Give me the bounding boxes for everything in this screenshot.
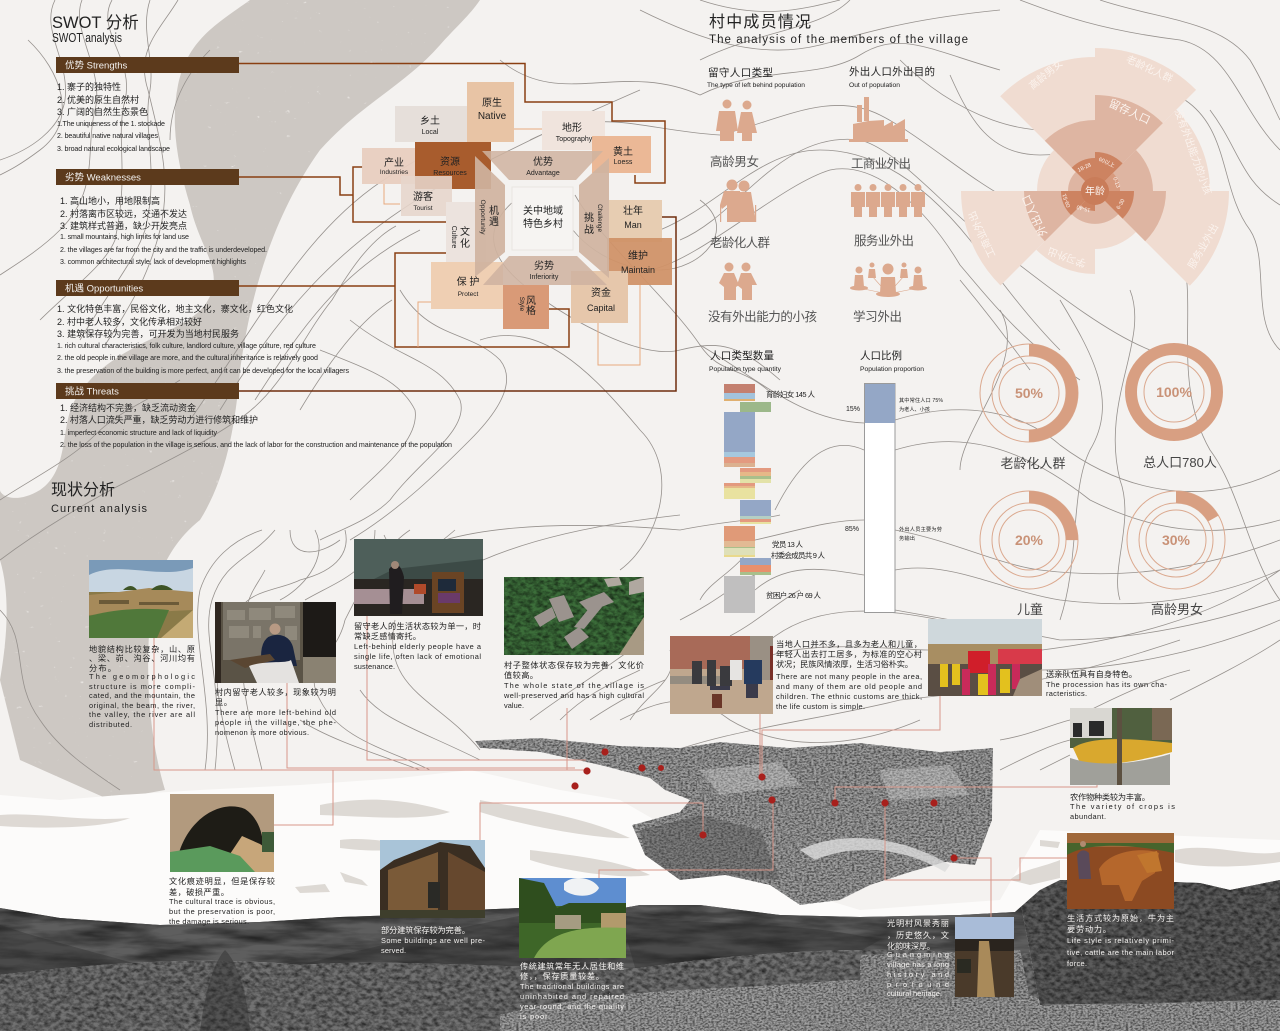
caption: local population: 状况；民族风情浓厚，生活习俗朴实。 bbox=[776, 659, 913, 669]
opportunities text bbox=[57, 303, 349, 375]
threats heading bar bbox=[56, 383, 239, 399]
caption: landform: cated, and the mountain, the bbox=[89, 691, 195, 700]
opportunities text: 2. 村中老人较多，文化传承相对较好 bbox=[57, 316, 202, 327]
diagram labels: 劣势 bbox=[534, 259, 554, 272]
heading: The type of left behind population bbox=[707, 82, 805, 89]
panel: left behind population types bbox=[707, 66, 817, 324]
photo: Guangming village building bbox=[955, 917, 1014, 997]
rose labels: 18-28 bbox=[1077, 162, 1092, 174]
centre circle bbox=[1081, 177, 1109, 205]
caption: traditional buildings: is poor. bbox=[520, 1012, 550, 1021]
diagram labels: 化 bbox=[460, 237, 470, 250]
strengths heading bar: 优势 Strengths bbox=[65, 60, 128, 72]
block: Native bbox=[467, 82, 514, 142]
caption: left-behind elderly: people in the village, the phe- bbox=[215, 718, 337, 727]
title: current analysis bbox=[51, 481, 148, 515]
rose labels: 留存人口 bbox=[1107, 96, 1153, 127]
weaknesses text bbox=[60, 195, 267, 266]
diagram labels: 维护 bbox=[628, 249, 648, 262]
diagram labels: 机 bbox=[489, 204, 499, 217]
rose labels: 60以上 bbox=[1097, 155, 1117, 170]
strengths text: 2. beautiful native natural villages bbox=[57, 132, 158, 140]
rose labels bbox=[965, 52, 1221, 271]
threats text: 2. 村落人口流失严重，缺乏劳动力进行修筑和维护 bbox=[60, 414, 258, 425]
diagram labels: 壮年 bbox=[623, 204, 643, 217]
threats text bbox=[60, 402, 452, 449]
caption: traditional buildings: year-round, and the quality bbox=[520, 1002, 624, 1011]
caption: Guangming village: 化韵味深厚。 bbox=[887, 941, 935, 951]
block: Maintain bbox=[607, 238, 672, 285]
opportunities text: 3. 建筑保存较为完善，可开发为当地村民服务 bbox=[57, 328, 239, 339]
proportion labels: 其中常住人口 75% bbox=[899, 396, 943, 404]
shrub bbox=[200, 950, 250, 1031]
photo: corn harvest bbox=[1070, 708, 1172, 785]
strengths text: 1.The uniqueness of the 1. stockade bbox=[57, 120, 165, 128]
caption: cultural traces: The cultural trace is obvious, bbox=[169, 897, 275, 906]
panel: opportunities bbox=[56, 280, 349, 375]
caption: cultural traces bbox=[169, 876, 275, 926]
heading: 留守人口类型 bbox=[708, 66, 773, 79]
caption: crops: abundant. bbox=[1070, 812, 1106, 821]
caption: village state: 村子整体状态保存较为完善，文化价 bbox=[504, 660, 644, 670]
block: Protect bbox=[431, 262, 503, 309]
block: Resources bbox=[415, 142, 491, 189]
caption: Guangming village: village has a long bbox=[887, 960, 949, 969]
weaknesses heading bar bbox=[56, 169, 239, 185]
chart: donut 50%: 50% bbox=[1015, 385, 1044, 401]
caption: local population bbox=[776, 639, 922, 711]
caption: left-behind elderly bbox=[215, 687, 337, 737]
dark hill slope bbox=[0, 916, 876, 975]
caption: elderly living state bbox=[354, 621, 482, 671]
rose labels: 09-51 bbox=[1062, 193, 1072, 208]
caption: landform: the valley, the river are all bbox=[89, 710, 195, 719]
photo: loess terraces bbox=[89, 560, 193, 638]
rose labels: 年龄 bbox=[1085, 184, 1105, 198]
strengths text bbox=[57, 81, 170, 153]
label: 服务业外出 bbox=[854, 233, 914, 248]
caption: elderly living state: 常缺乏感情寄托。 bbox=[354, 631, 421, 641]
chart: donut 30%: 30% bbox=[1162, 532, 1191, 548]
foreground scrub bbox=[0, 948, 1280, 1031]
chart: donut 50% bbox=[980, 344, 1078, 442]
diagram labels: 乡土 bbox=[420, 114, 440, 127]
diagram labels: 特色乡村 bbox=[523, 217, 563, 230]
diagram labels: Style bbox=[518, 297, 525, 312]
rose labels: 15-40 bbox=[1076, 203, 1091, 213]
caption: village state bbox=[503, 660, 644, 710]
caption: lifestyle: 要劳动力。 bbox=[1067, 924, 1111, 934]
caption: Guangming village: ，历史悠久，文 bbox=[887, 930, 949, 940]
trapezoid: Challenge bbox=[579, 158, 609, 278]
title: SWOT: SWOT analysis bbox=[52, 31, 122, 45]
diagram labels: Industries bbox=[380, 169, 409, 176]
trapezoid: Inferiority bbox=[483, 256, 607, 285]
caption: left-behind elderly: There are more left-behind old bbox=[215, 708, 336, 717]
connector lines to photos bbox=[154, 616, 1097, 917]
caption: left-behind elderly: 显。 bbox=[215, 698, 232, 707]
strengths text: 3. broad natural ecological landscape bbox=[57, 145, 170, 153]
inner sectors bbox=[1061, 152, 1134, 219]
stacked bars bbox=[724, 384, 771, 613]
caption: lifestyle bbox=[1067, 913, 1175, 968]
diagram labels: 资金 bbox=[591, 286, 611, 299]
label: 学习外出 bbox=[853, 309, 902, 324]
heading: Population proportion bbox=[860, 366, 924, 373]
weaknesses text: 2. 村落离市区较远，交通不发达 bbox=[60, 208, 187, 219]
donut label: children: 儿童 bbox=[1017, 602, 1043, 617]
threats text: 1. imperfect economic structure and lack of liquidity bbox=[60, 429, 217, 437]
caption: elderly living state: sustenance. bbox=[354, 662, 395, 671]
rose labels: 工商业外出 bbox=[965, 209, 998, 260]
caption: Guangming village: 光明村风景秀丽 bbox=[887, 918, 949, 928]
title: village members: 村中成员情况 bbox=[709, 13, 811, 31]
opportunities text: 1. rich cultural characteristics, folk culture, landlord culture, village culture, red culture bbox=[57, 342, 316, 350]
photo: bedroom bbox=[354, 539, 483, 616]
SWOT connectors bbox=[239, 64, 676, 391]
Guangming foreground bbox=[860, 950, 1030, 1005]
heading bbox=[707, 66, 805, 89]
threats text: 1. 经济结构不完善，缺乏流动资金 bbox=[60, 402, 196, 413]
foreground stalks bbox=[500, 979, 1280, 1031]
caption: Guangming village: profound bbox=[887, 980, 949, 989]
threats text: 2. the loss of the population in the village is serious, and the lack of labor for the construction and maintenance of the population bbox=[60, 441, 452, 449]
bar labels bbox=[766, 389, 826, 600]
photo: ox ploughing bbox=[1067, 833, 1174, 909]
diagram labels: Capital bbox=[587, 303, 615, 313]
caption: local population: 当地人口并不多，且多为老人和儿童， bbox=[776, 639, 922, 649]
diagram labels: 黄土 bbox=[613, 145, 633, 158]
trapezoid: Advantage bbox=[482, 151, 603, 180]
trapezoid: Opportunity bbox=[475, 156, 505, 277]
diagram labels: Loess bbox=[614, 159, 633, 166]
strengths text: 1. 寨子的独特性 bbox=[57, 81, 121, 92]
label: 工商业外出 bbox=[851, 156, 911, 171]
threats heading bar: 挑战 Threats bbox=[65, 386, 119, 398]
heading: Out of population bbox=[849, 82, 900, 89]
caption: landform: The geomorphologic bbox=[89, 672, 195, 681]
caption: local population: 年轻人出去打工居多，为标准的空心村 bbox=[776, 649, 922, 659]
caption: procession: The procession has its own cha- bbox=[1046, 680, 1168, 689]
caption: traditional buildings: uninhabited and repaired bbox=[520, 992, 624, 1001]
chart: age rose diagram bbox=[961, 48, 1229, 286]
diagram labels: Local bbox=[422, 129, 439, 136]
diagram labels: Tourist bbox=[413, 205, 433, 212]
bar labels: 村委会成员共 9 人 bbox=[771, 550, 826, 560]
village panorama bbox=[475, 738, 993, 905]
title: village members: The analysis of the members of the village bbox=[709, 34, 968, 46]
panel: weaknesses bbox=[56, 169, 267, 266]
proportion bar bbox=[864, 384, 895, 612]
diagram labels: 格 bbox=[526, 304, 536, 317]
block: Tourist bbox=[401, 176, 452, 216]
caption: elderly living state: 留守老人的生活状态较为单一，时 bbox=[354, 621, 481, 631]
rose labels: 0-13 bbox=[1111, 176, 1121, 189]
block: Local bbox=[395, 106, 467, 142]
caption: preserved buildings: Some buildings are well pre- bbox=[381, 936, 486, 945]
label: 高龄男女 bbox=[710, 154, 759, 169]
caption: preserved buildings bbox=[381, 925, 486, 955]
caption: local population: There are not many people in the area, bbox=[776, 672, 922, 681]
caption: traditional buildings: 修，，保存质量较差。 bbox=[520, 971, 604, 981]
caption: crops: 农作物种类较为丰富。 bbox=[1070, 792, 1150, 802]
opportunities text: 3. the preservation of the building is more perfect, and it can be developed for the local villagers bbox=[57, 367, 349, 375]
proportion labels: 外出人员主要为劳 bbox=[899, 525, 942, 533]
caption: crops: The variety of crops is bbox=[1070, 802, 1175, 811]
caption: local population: and many of them are old people and bbox=[776, 682, 922, 691]
caption: preserved buildings: served. bbox=[381, 946, 406, 955]
right dark tree area bbox=[1020, 880, 1280, 1005]
caption: procession: 送亲队伍具有自身特色。 bbox=[1046, 669, 1137, 679]
caption: traditional buildings: The traditional buildings are bbox=[520, 982, 624, 991]
proportion labels bbox=[845, 396, 943, 542]
caption: procession bbox=[1046, 669, 1168, 698]
opportunities heading bar bbox=[56, 280, 239, 296]
diagram labels: Maintain bbox=[621, 265, 655, 275]
diagram labels: Topography bbox=[556, 136, 593, 143]
caption: traditional buildings: 传统建筑常年无人居住和维 bbox=[520, 961, 624, 971]
photo: elderly man with dog bbox=[215, 602, 336, 683]
caption: cultural traces: 差，破损严重。 bbox=[169, 887, 229, 897]
diagram labels: 地形 bbox=[562, 121, 582, 134]
caption: landform: 、梁、峁、沟谷、河川均有 bbox=[89, 653, 195, 663]
panel: strengths bbox=[56, 57, 239, 153]
icon: elderly man and woman bbox=[716, 100, 757, 141]
heading bbox=[709, 349, 782, 373]
icon: five workers bbox=[851, 184, 925, 217]
heading bbox=[860, 349, 924, 373]
diagram labels: 优势 bbox=[533, 155, 553, 168]
caption: preserved buildings: 部分建筑保存较为完善。 bbox=[381, 925, 470, 935]
icon: aged couple with canes bbox=[720, 180, 756, 222]
chart: donut 20%: 20% bbox=[1015, 532, 1044, 548]
chart: donut 30% bbox=[1127, 491, 1225, 589]
proportion labels: 务输出 bbox=[899, 534, 915, 542]
label: 老龄化人群 bbox=[710, 236, 770, 250]
title: current analysis: 现状分析 bbox=[51, 481, 115, 499]
title: village members bbox=[709, 13, 968, 46]
caption: Guangming village: history and bbox=[887, 970, 949, 979]
photo: cave bbox=[170, 794, 274, 872]
opportunities heading bar: 机遇 Opportunities bbox=[65, 282, 143, 294]
caption: lifestyle: 生活方式较为原始，牛为主 bbox=[1067, 913, 1174, 923]
caption: traditional buildings bbox=[520, 961, 624, 1021]
bar labels: 党员 13 人 bbox=[772, 539, 804, 549]
block: Culture bbox=[446, 202, 486, 271]
diagram labels: Opportunity bbox=[479, 199, 486, 235]
rose labels: 没有外出能力的小孩 bbox=[1172, 107, 1215, 196]
donut label: elderly men and women: 高龄男女 bbox=[1151, 602, 1203, 617]
caption: elderly living state: single life, often lack of emotional bbox=[354, 652, 481, 661]
chart: donut 100%: 100% bbox=[1156, 384, 1192, 400]
title: SWOT bbox=[52, 13, 139, 45]
panel: threats bbox=[56, 383, 452, 449]
caption: left-behind elderly: 村内留守老人较多，现象较为明 bbox=[215, 687, 336, 697]
proportion labels: 15% bbox=[846, 406, 860, 413]
heading: Population type quantity bbox=[709, 366, 782, 373]
donut label: total: 总人口780人 bbox=[1143, 455, 1217, 470]
heading: 人口类型数量 bbox=[710, 349, 774, 362]
panel: out-going population purposes bbox=[849, 65, 935, 324]
rose labels: 高龄男女 bbox=[1026, 56, 1065, 92]
caption: lifestyle: force. bbox=[1067, 959, 1087, 968]
strengths heading bar bbox=[56, 57, 239, 73]
diagram labels: Man bbox=[624, 220, 642, 230]
weaknesses text: 3. 建筑样式普通，缺少开发亮点 bbox=[60, 220, 187, 231]
heading bbox=[849, 65, 935, 89]
proportion labels: 为老人、小孩 bbox=[899, 405, 930, 413]
diagram labels: 产业 bbox=[384, 156, 404, 169]
rose labels: 6-30 bbox=[1116, 198, 1126, 211]
centre square bbox=[512, 187, 573, 250]
diagram labels: Advantage bbox=[526, 170, 560, 177]
photo: aerial village bbox=[504, 577, 644, 655]
caption: elderly living state: Left-behind elderly people have a bbox=[354, 642, 482, 651]
caption: landform: structure is more compli- bbox=[89, 682, 196, 691]
rose labels: 外出人口 bbox=[1019, 193, 1050, 239]
caption: village state: The whole state of the village is bbox=[504, 681, 644, 690]
caption: left-behind elderly: nomenon is more obvious. bbox=[215, 728, 309, 737]
caption: landform: 分布。 bbox=[89, 663, 116, 673]
rose labels: 学习外出 bbox=[1046, 244, 1088, 270]
caption: cultural traces: 文化痕迹明显，但是保存较 bbox=[169, 876, 275, 886]
weaknesses text: 1. 高山地小，用地限制高 bbox=[60, 195, 160, 206]
donut label: aged: 老龄化人群 bbox=[1000, 456, 1066, 471]
block: Man bbox=[609, 200, 662, 242]
background: white lower brush area bbox=[0, 770, 1280, 931]
caption: village state: well-preserved and has a high cultural bbox=[503, 691, 644, 700]
far hills bbox=[0, 905, 1030, 970]
diagram labels bbox=[380, 96, 655, 317]
title: SWOT: SWOT 分析 bbox=[52, 13, 139, 32]
diagram labels: Inferiority bbox=[530, 274, 559, 281]
diagram labels: 游客 bbox=[413, 190, 433, 203]
caption: village state: value. bbox=[504, 701, 524, 710]
rose labels: 服务业外出 bbox=[1185, 221, 1221, 271]
background: grey brush mountain shape bbox=[0, 0, 480, 800]
diagram labels: Protect bbox=[458, 291, 478, 298]
background: scattered brush strokes bbox=[0, 800, 1280, 893]
caption: landform: 地貌结构比较复杂，山、原 bbox=[89, 644, 195, 654]
village location dots bbox=[571, 748, 958, 862]
heading: 外出人口外出目的 bbox=[849, 65, 935, 78]
heading: 人口比例 bbox=[860, 349, 902, 362]
diagram labels: 遇 bbox=[489, 216, 499, 228]
weaknesses heading bar: 劣势 Weaknesses bbox=[65, 172, 141, 184]
weaknesses text: 1. small mountains, high limits for land use bbox=[60, 233, 189, 241]
title: current analysis: Current analysis bbox=[51, 503, 148, 515]
strengths text: 2. 优美的原生自然村 bbox=[57, 94, 139, 105]
photo: wedding procession bbox=[928, 619, 1042, 696]
proportion labels: 85% bbox=[845, 526, 859, 533]
middle sectors bbox=[1024, 95, 1166, 241]
weaknesses text: 2. the villages are far from the city and the traffic is underdeveloped. bbox=[60, 246, 267, 254]
caption: landform: original, the beam, the river, bbox=[89, 701, 195, 710]
diagram labels: 战 bbox=[584, 224, 594, 236]
caption: cultural traces: but the preservation is poor, bbox=[169, 907, 275, 916]
caption: village state: 值较高。 bbox=[504, 670, 538, 680]
diagram labels: 关中地域 bbox=[523, 204, 563, 217]
photo: old brick building bbox=[380, 840, 485, 918]
outer sectors bbox=[961, 48, 1229, 286]
photo: abandoned buildings bbox=[519, 878, 626, 958]
diagram labels: Culture bbox=[450, 226, 457, 248]
caption: lifestyle: Life style is relatively primi- bbox=[1067, 936, 1175, 945]
caption: landform: distributed. bbox=[89, 720, 132, 729]
photo: villagers sitting bbox=[670, 636, 773, 714]
caption: Guangming village: Guangming bbox=[887, 950, 949, 959]
opportunities text: 1. 文化特色丰富，民俗文化，地主文化，寨文化，红色文化 bbox=[57, 303, 293, 314]
background: contour lines bbox=[0, 0, 1280, 790]
diagram labels: 风 bbox=[526, 295, 536, 307]
bar labels: 贫困户 26 户 69 人 bbox=[766, 590, 822, 600]
diagram labels: 挑 bbox=[584, 211, 594, 224]
diagram labels: Native bbox=[478, 111, 507, 122]
caption: local population: children. The ethnic customs are thick, bbox=[776, 692, 922, 701]
caption: landform bbox=[89, 644, 196, 729]
caption: Guangming village: cultural heritage. bbox=[887, 989, 942, 998]
rose labels: 老龄化人群 bbox=[1124, 52, 1175, 85]
icon: factory bbox=[849, 97, 908, 142]
caption: Guangming village bbox=[887, 918, 949, 998]
chart: donut 20% bbox=[980, 491, 1078, 589]
icon: network of people bbox=[850, 262, 927, 297]
caption: local population: the life custom is simple. bbox=[776, 702, 865, 711]
label: 没有外出能力的小孩 bbox=[708, 309, 817, 324]
block: Industries bbox=[362, 148, 426, 184]
diagram labels: Resources bbox=[433, 170, 467, 177]
block: Style bbox=[503, 285, 549, 329]
caption: procession: racteristics. bbox=[1046, 689, 1087, 698]
bar labels: 育龄妇女 145 人 bbox=[766, 389, 816, 399]
block: Loess bbox=[592, 136, 651, 173]
caption: lifestyle: tive, cattle are the main labor bbox=[1067, 948, 1175, 957]
diagram labels: 保 护 bbox=[457, 275, 479, 288]
SWOT diagram bbox=[362, 82, 672, 329]
diagram labels: 资源 bbox=[440, 155, 460, 168]
landscape photo, grey hills and scrub bbox=[0, 880, 1280, 1031]
diagram labels: 文 bbox=[460, 225, 470, 238]
block: Capital bbox=[571, 271, 628, 323]
chart: population type quantity bbox=[709, 349, 826, 613]
block: Topography bbox=[542, 111, 605, 150]
weaknesses text: 3. common architectural style, lack of development highlights bbox=[60, 258, 246, 266]
diagram labels: Challenge bbox=[596, 204, 603, 232]
opportunities text: 2. the old people in the village are more, and the cultural inheritance is relatively good bbox=[57, 354, 318, 362]
diagram labels: 原生 bbox=[482, 96, 502, 109]
icon: children bbox=[719, 262, 757, 300]
chart: donut 100% bbox=[1131, 349, 1217, 435]
chart: population proportion bbox=[845, 349, 943, 612]
strengths text: 3. 广阔的自然生态景色 bbox=[57, 106, 148, 117]
caption: cultural traces: the damage is serious. bbox=[169, 917, 249, 926]
caption: crops bbox=[1070, 792, 1175, 821]
